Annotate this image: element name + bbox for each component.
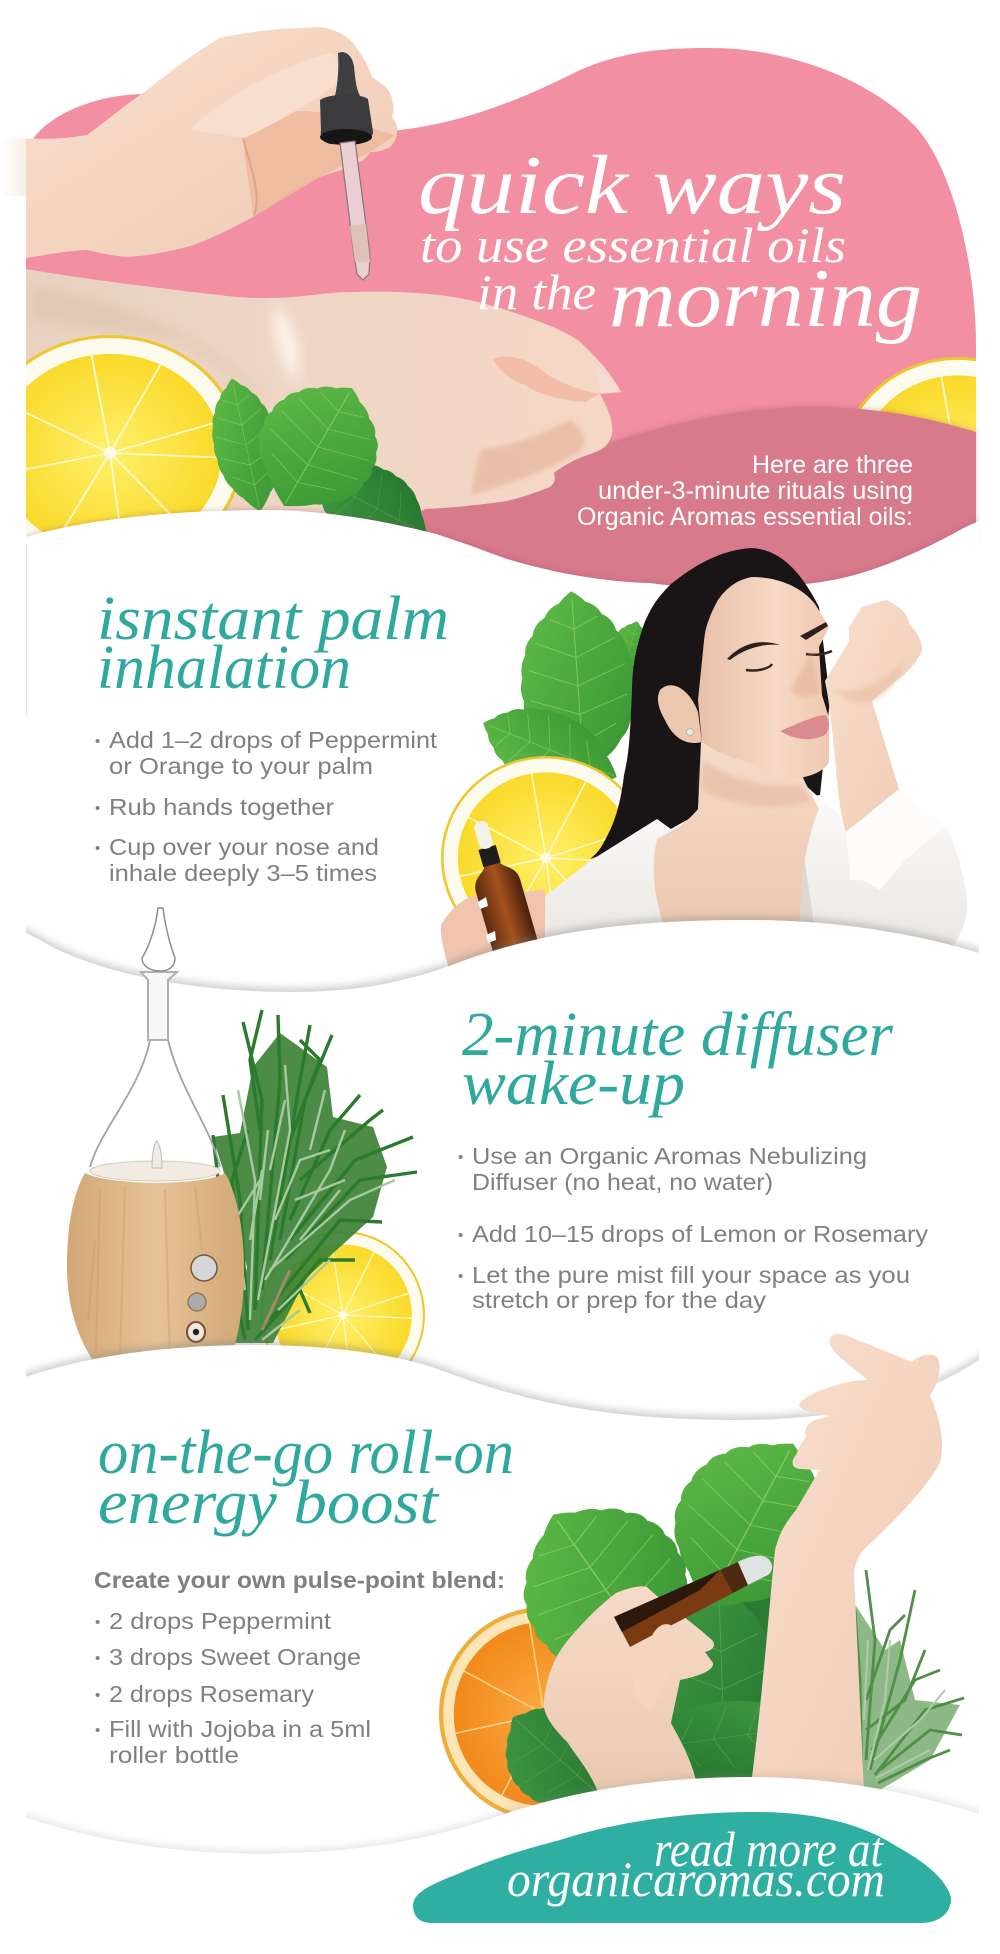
neck and chest (654, 742, 819, 925)
photo: raised arm and hand (751, 1334, 942, 1790)
rosemary dark blades (213, 1010, 417, 1340)
lips (780, 715, 829, 739)
photo: mint cluster (480, 1408, 860, 1832)
section 3 intro: Create your own pulse-point blend: (94, 1567, 505, 1593)
bottle neck (720, 1562, 748, 1593)
dropper cap (320, 95, 373, 144)
bottle (458, 815, 539, 957)
section 3 bullet list (95, 1608, 371, 1768)
mint leaf upper (514, 587, 642, 785)
section 2 bullet list: • (458, 1149, 463, 1166)
mint leaf dark low (633, 1690, 811, 1786)
fist shading (835, 660, 905, 703)
icon: mint leaves left (200, 358, 445, 570)
face (698, 577, 829, 778)
section 2 heading: 2-minute diffuser (462, 1001, 894, 1069)
mint leaf small back (599, 616, 657, 694)
cta line 2: organicaromas.com (507, 1851, 885, 1907)
sleeve (846, 790, 946, 890)
section 1 bullet list: • (95, 840, 100, 857)
hair (590, 548, 830, 859)
panel: hero darker pink wave (420, 407, 976, 600)
glass neck (141, 972, 177, 1040)
fingernail (592, 362, 621, 393)
hero title (418, 139, 922, 345)
panel: hero pink blob (26, 48, 976, 570)
roller ball (738, 1556, 772, 1585)
pill shape (413, 1812, 951, 1923)
title line 3: in the (477, 264, 596, 320)
photo: lower hand palm (544, 1586, 714, 1795)
mint leaf main (232, 358, 404, 536)
panel: white wave section 2 (26, 912, 979, 992)
arm highlight (274, 302, 299, 385)
intro text (577, 451, 913, 531)
section 2 bullet list: Diffuser (no heat, no water) (472, 1169, 773, 1195)
shirt fold shadow (780, 830, 815, 930)
photo: rosemary right (852, 1570, 964, 1790)
section 1 bullet list (95, 727, 437, 886)
icon: lemon slice left (26, 335, 236, 537)
photo: mint and lemon behind woman (441, 587, 657, 960)
upper hand (20, 27, 397, 259)
section 2 bullet list: • (458, 1268, 463, 1285)
arm shadow (34, 290, 169, 334)
mint leaf dark middle (664, 1583, 780, 1777)
mint leaf lower (299, 442, 445, 570)
button (188, 1293, 206, 1311)
section 2 heading: wake-up (462, 1050, 685, 1118)
rosemary woody stem (262, 1270, 290, 1330)
nose shade (790, 650, 820, 697)
section 3 bullet list: 2 drops Peppermint (109, 1608, 332, 1634)
photo: roller bottle (614, 1556, 772, 1647)
mint leaf lower (469, 688, 631, 812)
ear (658, 685, 702, 743)
call to action pill (413, 1812, 951, 1923)
intro text: Organic Aromas essential oils: (577, 503, 913, 531)
photo: lemon slice section 2 (261, 1231, 425, 1399)
photo: holding thumb (633, 1624, 676, 1712)
back of hand shade (470, 420, 584, 495)
glass rim (90, 1161, 220, 1181)
section 2 bullet list: Add 10–15 drops of Lemon or Rosemary (472, 1221, 928, 1247)
rosemary blades right (855, 1570, 964, 1783)
section 3 bullet list: • (95, 1687, 100, 1704)
wood base (67, 1173, 244, 1370)
section 3 bullet list: • (95, 1614, 100, 1631)
thumb (190, 53, 338, 138)
brows (727, 622, 828, 660)
eyes (746, 651, 832, 671)
intro text: Here are three (752, 451, 913, 479)
panel: white wave section 3 (26, 1338, 979, 1420)
section 2 bullet list: • (458, 1227, 463, 1244)
section 1 bullet list: inhale deeply 3–5 times (109, 860, 377, 886)
title line 3 large: morning (609, 252, 922, 345)
section 1 bullet list: Rub hands together (109, 794, 334, 820)
section 3 bullet list: • (95, 1722, 100, 1739)
section 1 bullet list: • (95, 800, 100, 817)
palm shade (244, 111, 395, 217)
shirt (544, 785, 967, 960)
photo: woman smelling wrist (544, 548, 967, 960)
nails (478, 897, 505, 964)
photo: rosemary bunch (213, 1010, 417, 1343)
wood grain (88, 1186, 202, 1360)
section 3 heading: energy boost (98, 1469, 440, 1537)
palm crease (243, 138, 257, 215)
section 1 heading: isnstant palm (97, 585, 449, 653)
nozzle (152, 1141, 162, 1168)
rosemary pale blades (864, 1640, 945, 1778)
mint leaf lower left (480, 1680, 632, 1832)
panel: white wave section 1 (26, 506, 979, 598)
section 2 bullet list: stretch or prep for the day (472, 1287, 766, 1313)
section 3 bullet list: roller bottle (109, 1742, 239, 1768)
icon: dropper (320, 52, 373, 280)
section 1 bullet list: • (95, 733, 100, 750)
faded cream edge (0, 138, 26, 196)
lower arm (26, 269, 621, 514)
knob (191, 1255, 217, 1281)
bottle dark shade (614, 1570, 720, 1632)
section 3 bullet list: Fill with Jojoba in a 5ml (109, 1716, 371, 1742)
section 3 bullet list: 3 drops Sweet Orange (109, 1644, 361, 1670)
section 3 bullet list: • (95, 1650, 100, 1667)
photo: hand with amber bottle (441, 815, 545, 975)
bottle body (614, 1570, 733, 1647)
section 2 bullet list (458, 1143, 928, 1313)
dropper collar (320, 129, 372, 145)
holding hand (441, 890, 545, 975)
section 3 bullet list: 2 drops Rosemary (109, 1681, 314, 1707)
section 1 bullet list: Add 1–2 drops of Peppermint (109, 727, 437, 753)
section 2 bullet list: Use an Organic Aromas Nebulizing (472, 1143, 867, 1169)
photo: orange slice (439, 1607, 649, 1821)
mint leaf narrow (200, 372, 292, 518)
earring (686, 728, 694, 736)
glass reservoir (90, 1040, 220, 1167)
power socket (187, 1322, 205, 1342)
section 2 bullet list: Let the pure mist fill your space as you (472, 1262, 910, 1288)
section 1 heading: inhalation (97, 634, 351, 702)
rosemary mass (213, 1033, 387, 1343)
dropper tube (340, 141, 370, 280)
title line 2: to use essential oils (420, 217, 846, 273)
intro text: under-3-minute rituals using (598, 477, 913, 505)
section 1 bullet list: or Orange to your palm (109, 753, 373, 779)
mint leaf top right (640, 1408, 860, 1642)
panel: white wave section 4 (26, 1772, 979, 1854)
photo: nebulizing diffuser (67, 908, 244, 1370)
dropper liquid (350, 224, 370, 262)
cta line 1: read more at (654, 1821, 884, 1877)
section 1 heading (97, 585, 449, 702)
mint dark backing (660, 1590, 780, 1785)
thin left edge line (26, 545, 27, 715)
icon: lemon slice right (858, 357, 976, 432)
rosemary mass right (852, 1600, 960, 1790)
mint leaf big left (485, 1467, 727, 1713)
hero photo: hand with dropper and wrist (20, 27, 621, 560)
glass tip (142, 908, 175, 971)
lemon half (441, 756, 651, 960)
title line 1: quick ways (418, 139, 846, 232)
curled finger (493, 356, 600, 402)
section 3 heading (98, 1419, 514, 1537)
section 2 heading (462, 1001, 894, 1118)
section 1 bullet list: Cup over your nose and (109, 834, 379, 860)
section 3 heading: on-the-go roll-on (98, 1419, 514, 1487)
forearm and fist (825, 600, 922, 832)
dropper bulb (335, 52, 360, 96)
rosemary light blades (235, 1065, 395, 1340)
neck shadow (700, 760, 810, 806)
